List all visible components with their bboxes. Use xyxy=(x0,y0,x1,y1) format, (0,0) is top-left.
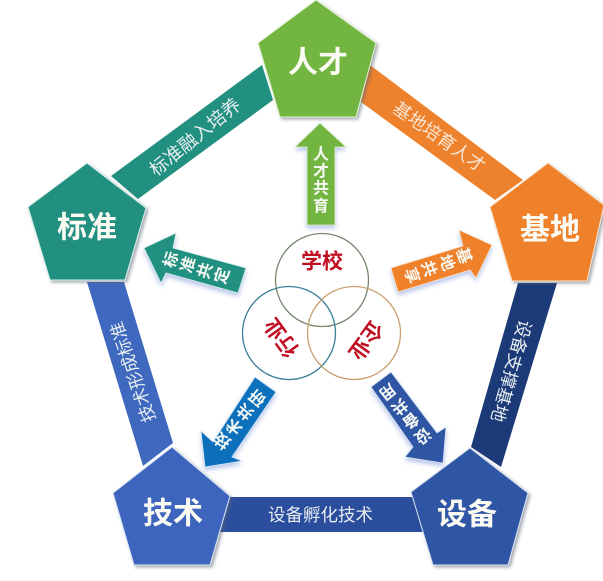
circle: 企业: 企业 xyxy=(343,316,387,364)
arrow: 设备共用: 备 xyxy=(398,408,423,433)
circle: 行业: 行业 xyxy=(260,313,304,361)
arrow: 设备共用: 共 xyxy=(387,394,411,418)
arrow: 人才共育: 才 xyxy=(313,162,329,180)
arrow: 基地共享: 享 xyxy=(400,265,424,286)
circle: 企业 xyxy=(308,286,400,380)
arrow: 基地共享: 基 xyxy=(452,245,475,266)
pentagon: 基地 xyxy=(490,163,603,281)
circle: 行业 xyxy=(242,286,336,380)
pentagon: 技术: 技术 xyxy=(143,498,203,530)
arrow: 技术共研: 共 xyxy=(234,399,258,423)
arrow: 标准共定 xyxy=(144,233,246,293)
arrow: 设备共用: 用 xyxy=(375,379,399,403)
arrow: 人才共育: 共 xyxy=(313,180,329,198)
connector: 标准融入培养 xyxy=(111,65,273,199)
pentagon: 标准 xyxy=(28,163,146,280)
arrow: 基地共享: 地 xyxy=(435,252,458,273)
connector: 基地培育人才 xyxy=(361,65,523,200)
pentagon: 设备 xyxy=(411,448,528,565)
connector: 设备支撑基地: 设备支撑基地 xyxy=(487,318,535,424)
pentagon: 设备: 设备 xyxy=(437,498,497,532)
arrow: 技术共研: 术 xyxy=(223,414,247,438)
arrow: 设备共用 xyxy=(371,372,446,463)
arrow: 人才共育: 育 xyxy=(313,196,329,216)
arrow: 标准共定: 准 xyxy=(177,254,200,275)
connector: 技术形成标准: 技术形成标准 xyxy=(106,319,160,425)
arrow: 设备共用: 设 xyxy=(410,423,434,447)
arrow: 技术共研: 技 xyxy=(210,428,235,453)
arrow: 标准共定: 标 xyxy=(160,249,183,270)
arrow: 基地共享 xyxy=(391,230,492,292)
arrow: 标准共定: 定 xyxy=(211,265,234,286)
pentagon: 技术 xyxy=(113,447,230,565)
connector: 基地培育人才: 基地培育人才 xyxy=(389,98,489,176)
arrow: 人才共育 xyxy=(295,123,346,225)
arrow: 技术共研: 研 xyxy=(246,385,270,409)
connector: 标准融入培养: 标准融入培养 xyxy=(145,94,245,180)
arrow: 技术共研 xyxy=(201,377,276,467)
circle: 学校 xyxy=(276,234,368,326)
pentagon: 人才: 人才 xyxy=(288,46,348,80)
pentagon: 标准: 标准 xyxy=(57,212,117,244)
circle: 学校: 学校 xyxy=(301,250,343,274)
connector: 设备孵化技术: 设备孵化技术 xyxy=(268,505,373,525)
pentagon: 基地: 基地 xyxy=(520,214,580,246)
pentagon: 人才 xyxy=(258,0,376,117)
connector: 技术形成标准 xyxy=(87,282,173,466)
arrow: 人才共育: 人 xyxy=(313,146,329,164)
arrow: 标准共定: 共 xyxy=(194,260,217,281)
connector: 设备支撑基地 xyxy=(471,283,557,467)
arrow: 基地共享: 共 xyxy=(417,258,440,279)
connector: 设备孵化技术 xyxy=(215,497,425,532)
